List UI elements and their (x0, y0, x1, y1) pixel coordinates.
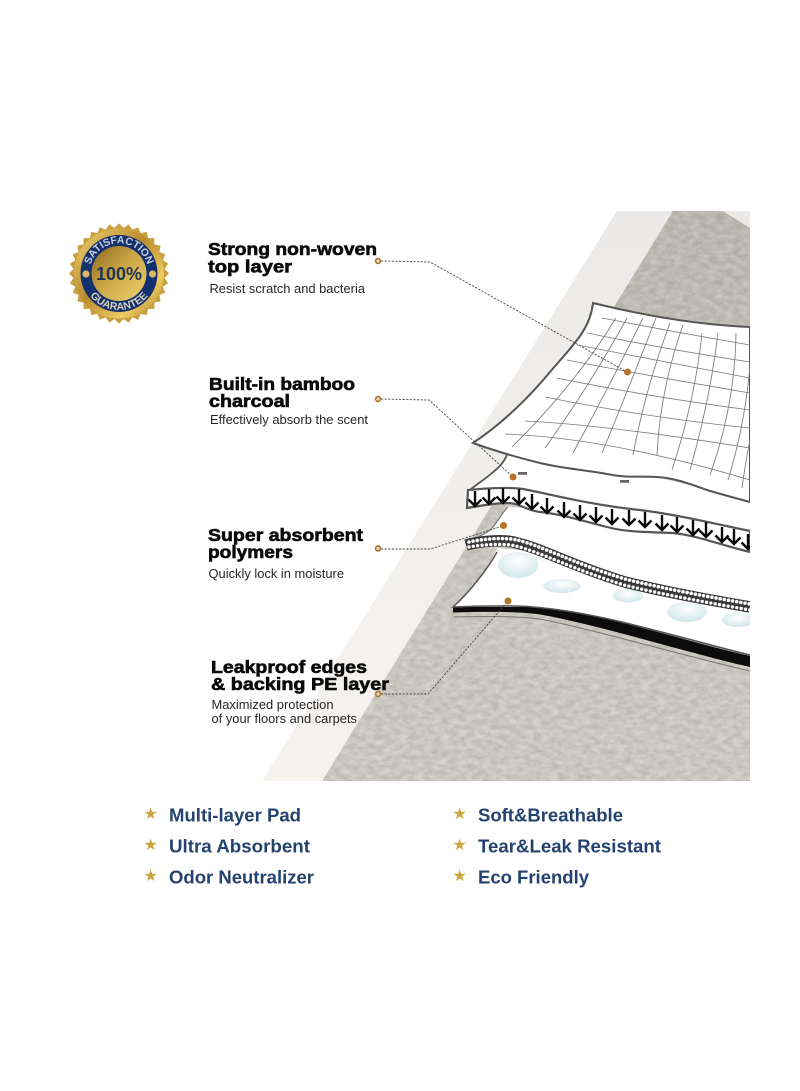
seal: satisfaction guarantee badge: 100% (96, 264, 142, 284)
text block: super absorbent polymers: polymers (208, 542, 293, 562)
feature list: right column: Soft&Breathable (478, 806, 623, 826)
text block: strong non-woven top layer: Resist scratch and bacteria (210, 282, 365, 296)
text block: leakproof edges and backing: Maximized protection (212, 698, 334, 712)
feature list: right column: Tear&Leak Resistant (478, 836, 661, 856)
markers: layer dots (500, 368, 631, 604)
leader line: top layer (381, 261, 627, 372)
feature list: right column: Eco Friendly (478, 868, 589, 888)
text block: built-in bamboo charcoal (209, 374, 369, 427)
layer: backing PE layer (453, 607, 750, 671)
icon: small grey dashes (518, 472, 629, 483)
seal: satisfaction guarantee badge: SATISFACTION (84, 236, 154, 264)
layer: polymer bubble band (466, 539, 750, 610)
panel: pad background (262, 211, 750, 781)
seal: satisfaction guarantee badge: GUARANTEE (92, 292, 148, 310)
icon: downward arrows (468, 488, 754, 549)
text block: leakproof edges and backing: of your floors and carpets (212, 712, 357, 726)
text block: strong non-woven top layer: top layer (208, 256, 292, 276)
feature list: left column: Odor Neutralizer (169, 868, 314, 888)
feature list: left column: ★ (144, 806, 158, 823)
text block: leakproof edges and backing (211, 657, 389, 726)
text block: built-in bamboo charcoal: charcoal (209, 391, 290, 411)
layer: absorbent core with droplets (453, 548, 754, 655)
text block: built-in bamboo charcoal: Effectively absorb the scent (210, 413, 369, 427)
text block: leakproof edges and backing: & backing PE layer (211, 674, 389, 694)
feature list: left column (144, 806, 314, 888)
feature list: right column: ★ (452, 837, 467, 854)
chart: mesh grid (505, 318, 750, 488)
diagram: exploded pad layers (453, 303, 754, 671)
layer: white sheet above core (465, 507, 750, 606)
feature list: right column (452, 806, 661, 888)
leader line: bamboo charcoal (381, 399, 513, 477)
text block: strong non-woven top layer (208, 239, 377, 296)
text block: super absorbent polymers (208, 525, 363, 581)
leader line: polymers (381, 526, 503, 549)
feature list: left column: Multi-layer Pad (169, 806, 301, 826)
text block: strong non-woven top layer: Strong non-woven (208, 239, 377, 259)
leader line: backing layer (381, 601, 508, 694)
layer: top non-woven sheet (473, 303, 750, 502)
feature list: left column: Ultra Absorbent (169, 836, 310, 856)
text block: super absorbent polymers: Quickly lock in moisture (208, 567, 344, 581)
feature list: left column: ★ (144, 837, 158, 854)
markers: label rings (376, 259, 380, 696)
feature list: right column: ★ (452, 806, 467, 823)
text block: leakproof edges and backing: Leakproof edges (211, 657, 367, 677)
feature list: left column: ★ (144, 868, 158, 885)
text block: built-in bamboo charcoal: Built-in bamboo (209, 374, 355, 394)
seal: satisfaction guarantee badge (69, 224, 169, 324)
feature list: right column: ★ (452, 868, 467, 885)
layer: white sheet with charcoal band (467, 455, 754, 552)
text block: super absorbent polymers: Super absorbent (208, 525, 363, 545)
